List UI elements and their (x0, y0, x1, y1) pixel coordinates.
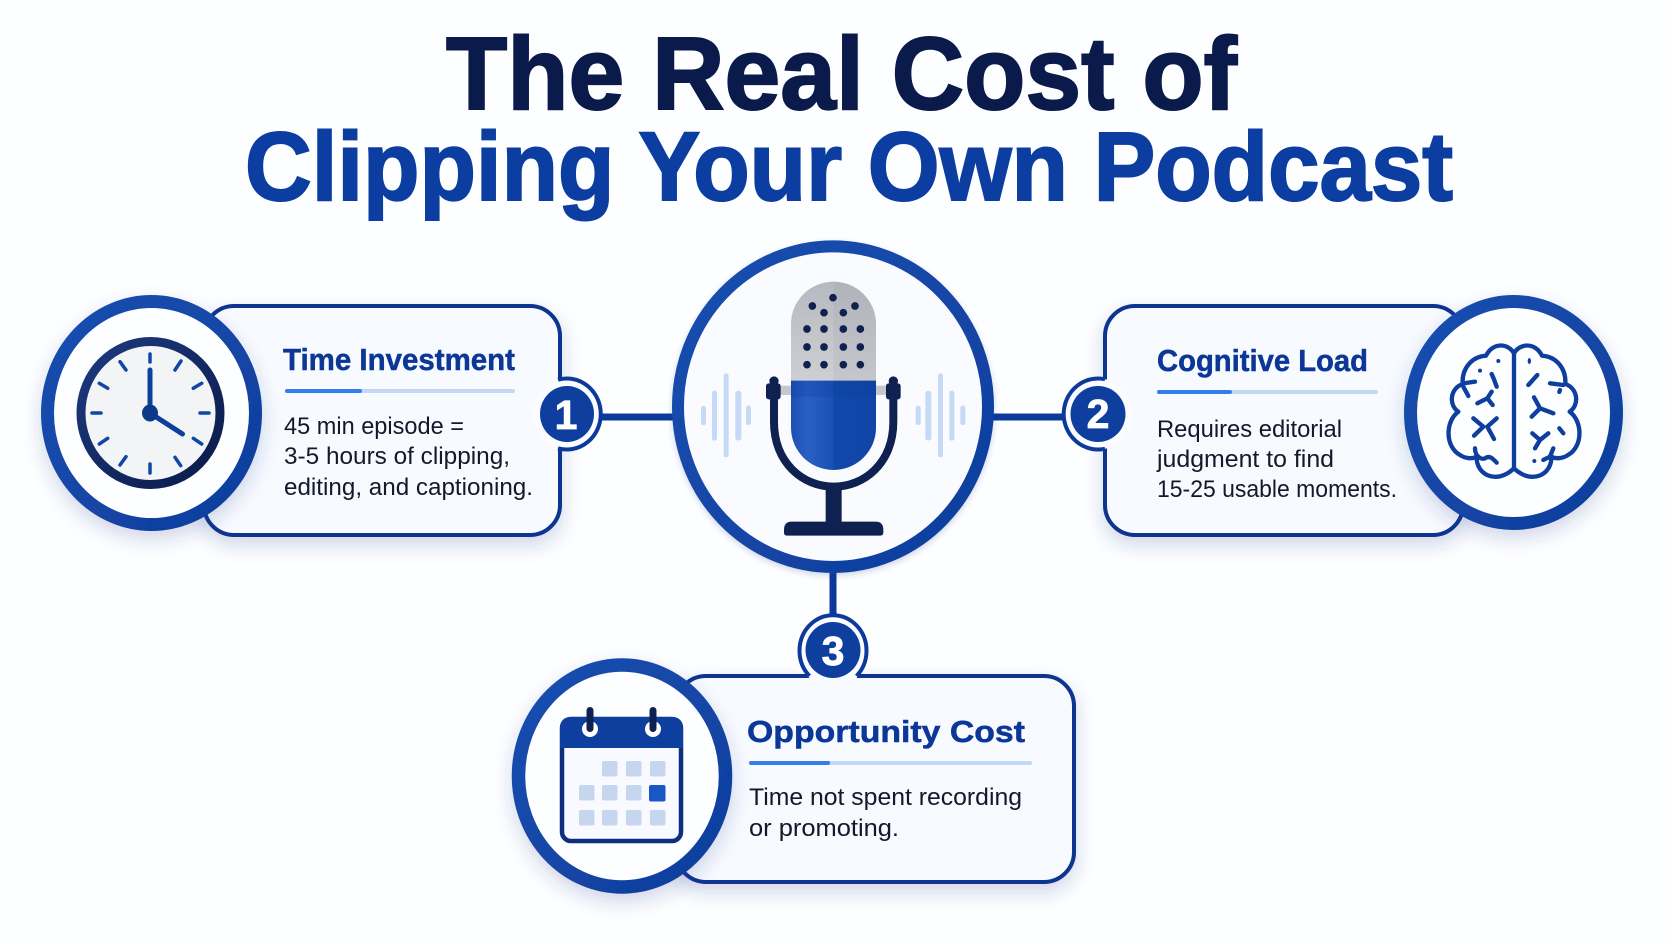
stand (766, 376, 901, 536)
badge 1: 1 (555, 392, 577, 438)
card 1 divider (285, 389, 515, 393)
badge 2 (1064, 378, 1132, 450)
grille dots (803, 294, 864, 368)
card 2 body (1156, 416, 1397, 503)
icon: central microphone (678, 246, 988, 567)
sound waves (701, 373, 965, 457)
card 2 body: 15-25 usable moments. (1157, 476, 1397, 503)
card 2 body: Requires editorial (1157, 416, 1342, 443)
connector lines (600, 414, 1064, 615)
title line 2: Clipping Your Own Podcast (245, 112, 1453, 221)
badge 3 (799, 615, 866, 678)
card 2 (1105, 306, 1463, 535)
icon: clock (48, 302, 256, 524)
card 1 body: 45 min episode = (284, 413, 464, 440)
panel: time investment (48, 302, 601, 535)
card 3 (676, 676, 1074, 882)
axle (780, 386, 887, 395)
card 3 title: Opportunity Cost (747, 714, 1025, 749)
card 1 body: 3-5 hours of clipping, (284, 443, 510, 470)
card 1 body (284, 413, 533, 501)
card 2 divider (1157, 390, 1378, 394)
capsule (791, 282, 876, 470)
card 1 (204, 306, 560, 535)
icon: brain (1410, 302, 1616, 524)
title line 1: The Real Cost of (446, 16, 1238, 131)
card 3 body (749, 784, 1022, 842)
badge 3: 3 (822, 628, 844, 674)
title (245, 16, 1453, 221)
card 3 divider (749, 761, 1032, 765)
icon: calendar (518, 665, 726, 887)
panel: cognitive load (1064, 302, 1616, 535)
card 1 title: Time Investment (283, 342, 515, 377)
card 2 body: judgment to find (1156, 446, 1334, 473)
card 3 body: or promoting. (749, 815, 899, 842)
badge 2: 2 (1087, 391, 1109, 437)
panel: opportunity cost (518, 615, 1074, 887)
card 2 title: Cognitive Load (1157, 343, 1368, 378)
card 3 body: Time not spent recording (749, 784, 1022, 811)
badge 1 (533, 378, 601, 450)
card 1 body: editing, and captioning. (284, 474, 533, 501)
